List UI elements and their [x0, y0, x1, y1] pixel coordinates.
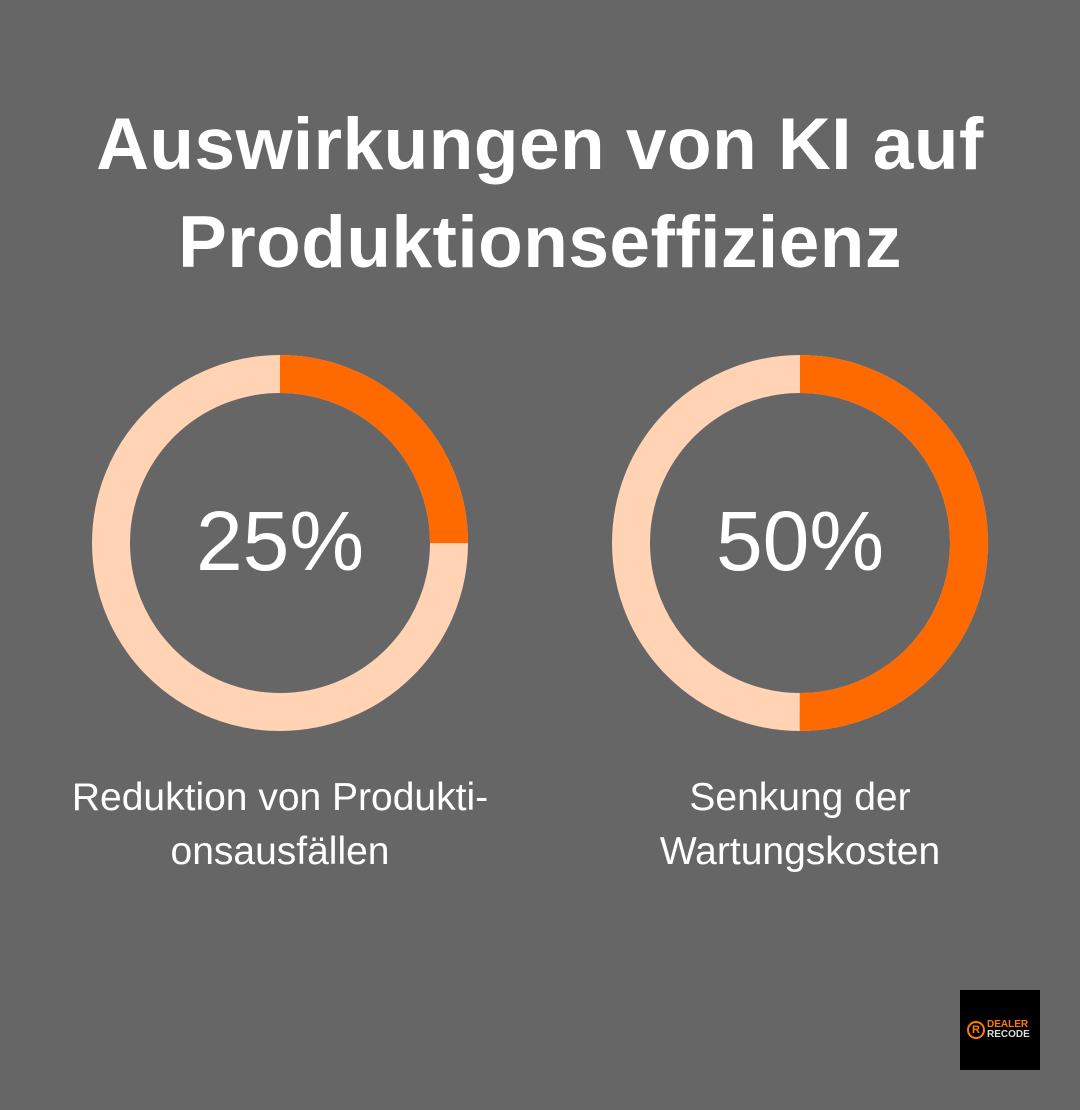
logo: RECODE — [987, 1029, 1030, 1040]
logo: R — [972, 1024, 980, 1036]
logo — [960, 990, 1040, 1070]
donut: 25% — [111, 374, 449, 712]
label: right: Senkung der — [689, 776, 911, 819]
label: right: Wartungskosten — [660, 830, 940, 873]
donut: 50% — [631, 374, 969, 712]
logo: DEALER — [987, 1019, 1028, 1030]
label: left — [72, 776, 488, 873]
donut: 50%: 50% — [716, 494, 884, 588]
label: left: onsausfällen — [170, 830, 390, 873]
title: Produktionseffizienz — [178, 202, 902, 283]
donut: 25%: 25% — [196, 494, 364, 588]
title — [96, 104, 984, 283]
label: left: Reduktion von Produkti- — [72, 776, 488, 819]
label: right — [660, 776, 940, 873]
title: Auswirkungen von KI auf — [96, 104, 984, 185]
